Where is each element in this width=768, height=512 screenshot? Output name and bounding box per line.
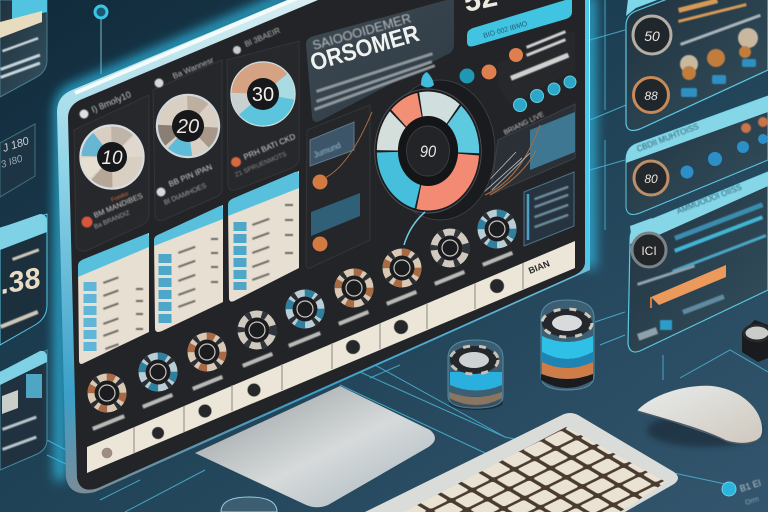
chip right edge [742,320,768,362]
gauge 1 [633,16,671,54]
caption: dial 1 [82,191,144,231]
header: dial 2 [154,55,215,88]
gauge 2: 88 [644,89,658,103]
icon: cyan node [722,478,762,507]
table 2 [154,205,223,332]
panel: left side lower [0,350,47,470]
header: dial 1: I) 8moly10 [90,89,132,115]
icon: orange badge [509,48,523,62]
panel: dial column 3 [227,26,299,190]
gauge 4: ICI [641,244,657,258]
dial 2 [156,94,220,158]
icon: wheel top pin [421,72,434,88]
icon: cyan node: B1 El [739,478,762,494]
icon: orange token [312,174,328,190]
monitor stand [195,386,435,507]
keyboard [365,413,678,512]
gauge 1: 50 [644,28,660,44]
dial 3: 30 [252,84,274,106]
panel: title ORSOMER: SAIOOOIDEMER [311,10,413,53]
chip captions [92,251,513,431]
wheel hub shadow ring [385,80,495,220]
panel: right middle: CBDII MUHTOISS [635,122,700,154]
monitor glow [60,0,590,480]
icons: cyan buttons [514,76,576,112]
panel: left side dark note: J 180 [0,135,31,155]
dial 1: 10 [101,148,123,169]
gauge 2 [634,78,668,112]
panel: right info [498,30,576,112]
panel: right middle [626,96,768,214]
table 3 [228,171,299,302]
caption: dial 2: BB PIN IPAN [167,162,214,189]
chip stack tall [541,300,594,390]
panel: right lower [628,172,768,352]
wheel bottom stem [404,212,425,245]
card icons [102,279,504,458]
icon: orange token lower [312,236,328,252]
cyan pill [467,0,572,46]
icon: cyan node: Orrn [744,496,760,507]
panel: right lower: AMMUOIJOI OIISS [675,183,743,216]
icons: blue buttons [680,134,768,178]
panel: left mini widgets [306,105,372,268]
panel: left side dark note: 3 I80 [0,153,24,171]
header: dial 2: Ba Wannesr [171,55,215,81]
gauge 3: 80 [644,172,658,186]
panel: right top [626,0,768,130]
dial 2: 20 [176,116,199,138]
caption: dial 1: BM MANDIBES [92,191,144,220]
icons: wheel top buttons [460,64,496,84]
monitor bezel [57,0,590,493]
panel: left side top [0,0,47,97]
panel: dial column 1 [74,89,149,251]
orange bar [651,265,726,305]
caption: dial 3 [231,132,297,179]
gauge 3 [634,161,668,195]
dial 1 [79,124,145,190]
panel: left side stat 38 [0,214,47,345]
panel: title ORSOMER [306,0,454,122]
header: dial 3 [233,26,282,54]
icon group: food badges [680,28,758,97]
caption: dial 2 [156,162,214,207]
glass chip bottom [221,497,277,512]
icon: pin marker [95,6,107,74]
chip stack small [448,340,503,410]
wheel label: 90 [420,143,436,161]
gauge 4 [632,233,666,267]
panel: left side dark note [0,124,35,197]
caption: dial 3: Z1 SPRUENMOTS [234,151,288,179]
table 1 [78,233,149,364]
caption: dial 1: Ba BRANDIZ [93,209,131,231]
segmented wheel [375,72,481,245]
caption: dial 2: Bl DIAMHOES [163,182,208,207]
caption: dial 3: PRH BATI CKD [242,132,297,162]
progress bars [672,202,766,273]
panel: dial column 2 [153,55,222,220]
panel: right bar chart [524,172,574,246]
panel: right chart wires: BRIANG LIVE [503,111,546,137]
mouse [637,386,763,447]
monitor side highlight [585,0,589,266]
caption: dial 1: Fresko [110,191,130,204]
panel: right chart wires [478,104,575,195]
monitor screen [68,0,585,490]
cream card strip [87,241,575,473]
button label: BIAN [527,258,551,276]
header: dial 3: Bl 3BAEIR [243,26,282,49]
title: ORSOMER [307,20,422,77]
panel: left mini widgets: Jumund [312,141,342,160]
row of poker chips [88,210,516,412]
cyan pill: BIO 002 IBMO [483,20,529,40]
dial 3 [230,61,296,127]
